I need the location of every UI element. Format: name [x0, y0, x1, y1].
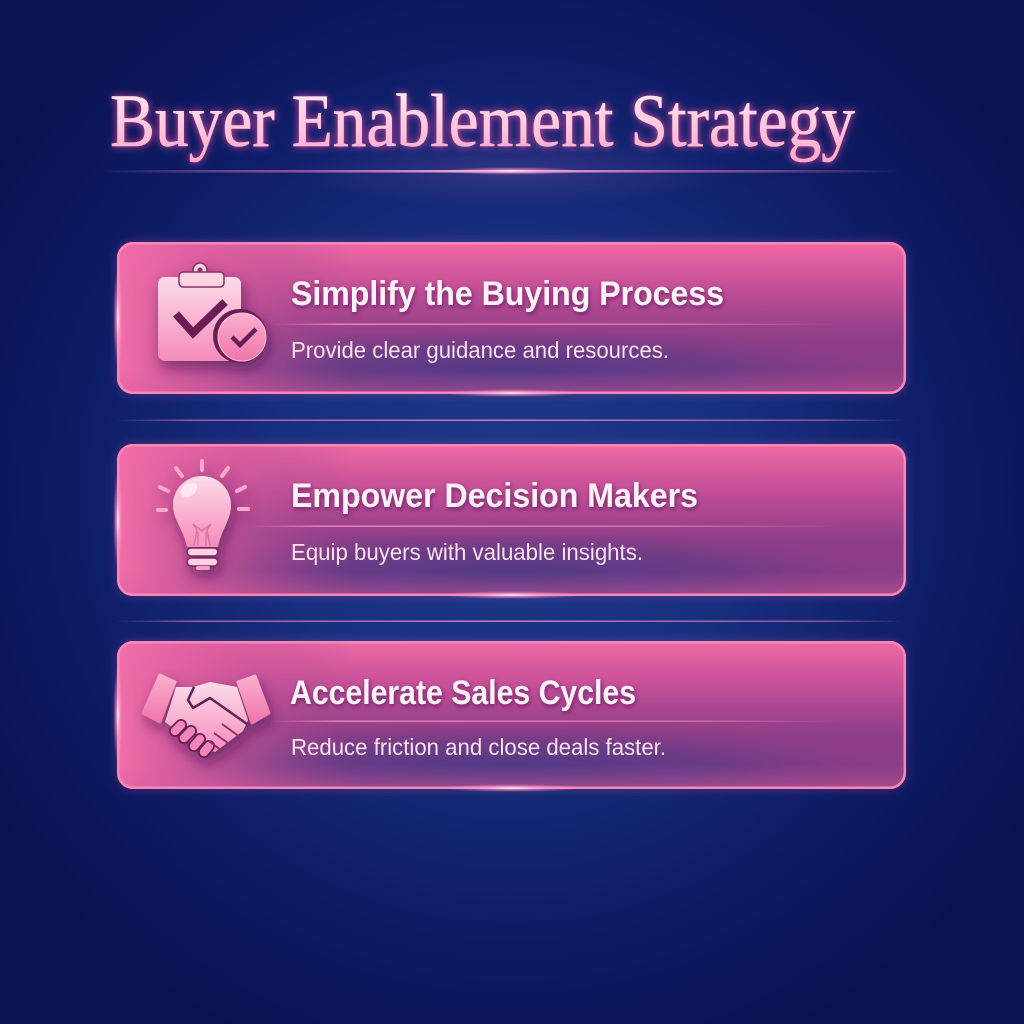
heading: Accelerate Sales Cycles — [290, 674, 636, 712]
heading: Empower Decision Makers — [291, 477, 698, 515]
separator 2 — [115, 620, 905, 622]
divider — [250, 526, 840, 527]
icon: clipboard with check — [158, 263, 267, 363]
description: Provide clear guidance and resources. — [291, 337, 669, 363]
description: Reduce friction and close deals faster. — [291, 734, 666, 760]
title underline glow — [100, 137, 900, 207]
divider — [270, 324, 840, 325]
panel: empower decision makers — [113, 444, 906, 599]
separator 1 — [115, 420, 905, 421]
icon: handshake — [143, 675, 269, 752]
description: Equip buyers with valuable insights. — [291, 539, 643, 565]
icon: light bulb — [158, 461, 248, 570]
card background — [113, 242, 906, 397]
card background — [113, 444, 906, 599]
heading: Simplify the Buying Process — [291, 275, 724, 313]
title: Buyer Enablement Strategy — [110, 80, 855, 163]
panel: simplify the buying process — [113, 242, 906, 397]
divider — [270, 720, 840, 722]
card background — [113, 641, 906, 792]
panel: accelerate sales cycles — [113, 641, 906, 792]
